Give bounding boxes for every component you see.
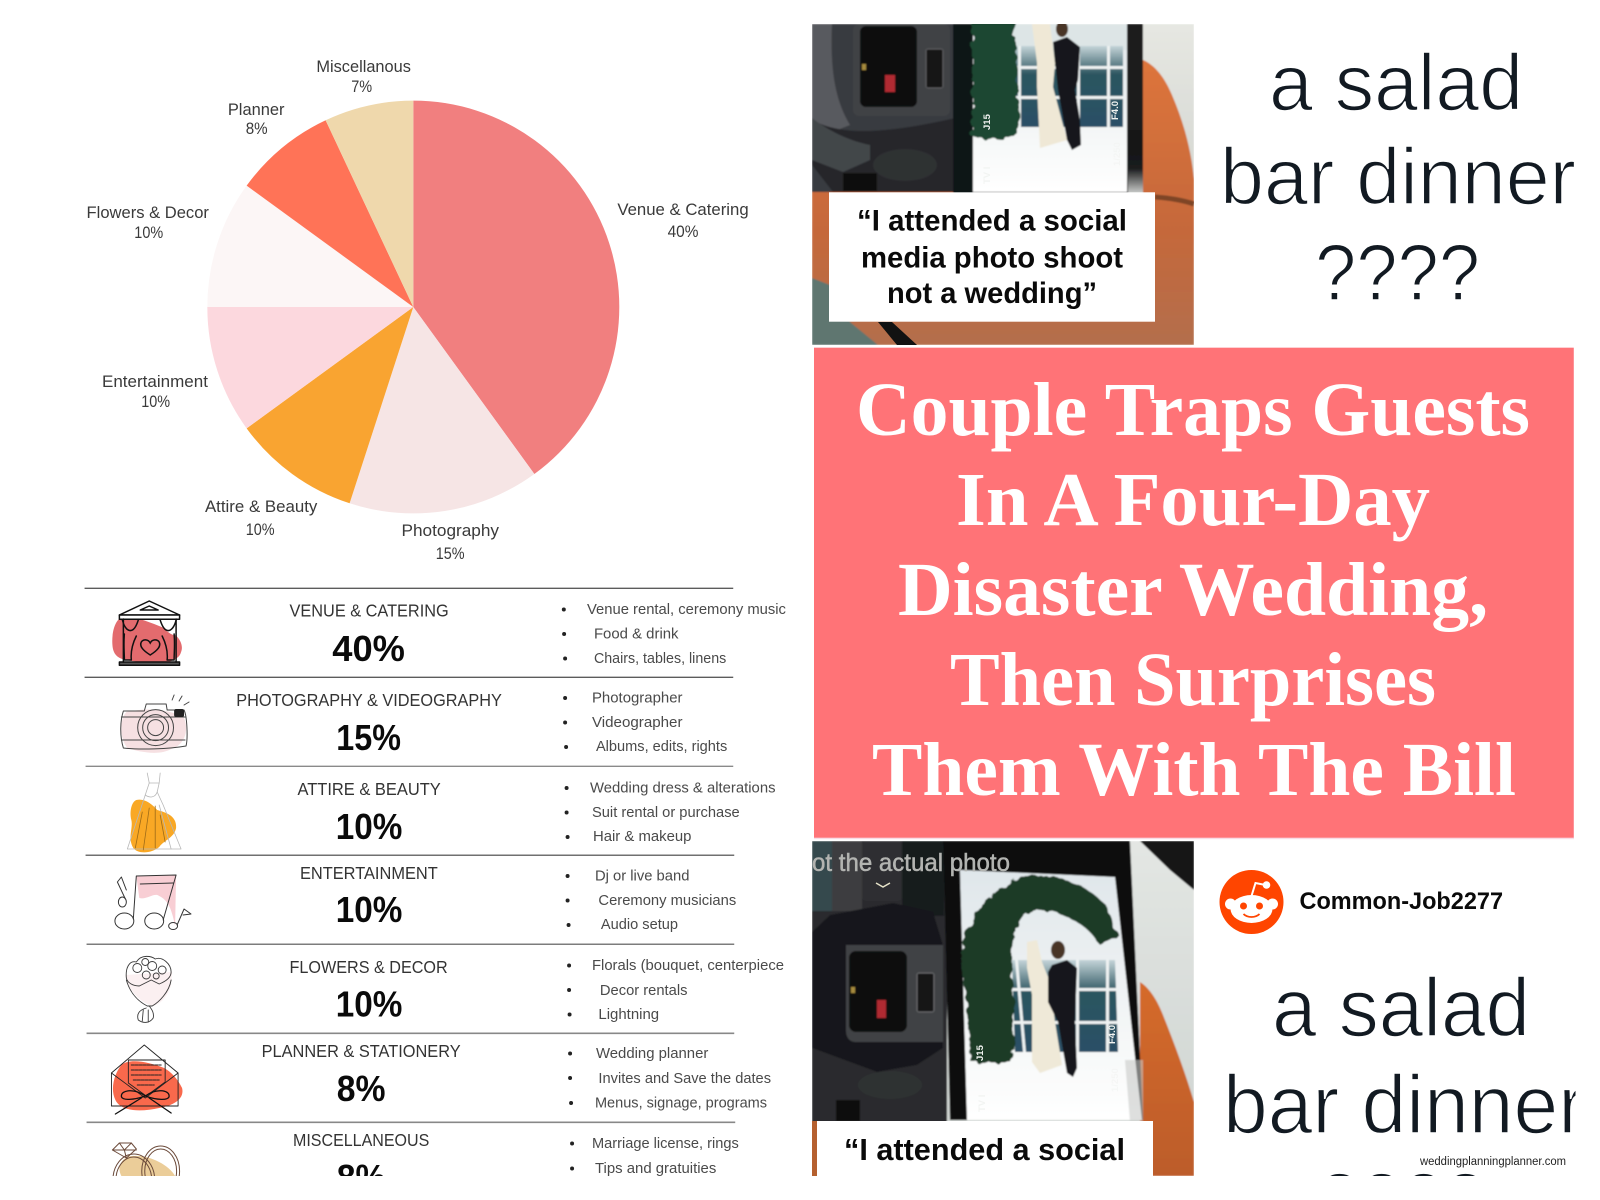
pie labels: Attire & Beauty	[205, 498, 318, 516]
heading: entertainment: ENTERTAINMENT	[300, 863, 438, 883]
text: a salad bar dinner top: ????	[1315, 228, 1480, 317]
watermark: weddingplanningplanner.com	[1419, 1156, 1566, 1168]
list: miscellaneous items: Marriage license, rings	[592, 1135, 739, 1152]
list: venue items	[562, 601, 786, 667]
screen readouts: TV I	[977, 1095, 988, 1112]
heading: photography and videography: PHOTOGRAPHY & VIDEOGRAPHY	[236, 690, 502, 710]
text: a salad bar dinner bottom	[1223, 961, 1585, 1200]
icon: camera	[121, 695, 189, 753]
list: planner items	[568, 1045, 771, 1112]
screen readouts: 1/250	[1112, 142, 1123, 166]
pie labels: 40%	[668, 223, 699, 241]
photo: couple under floral arch	[812, 841, 1194, 1176]
text: a salad bar dinner top	[1220, 38, 1576, 317]
pie labels: Miscellanous	[316, 58, 411, 76]
list: flowers items: Decor rentals	[600, 982, 687, 999]
percent: 10%: 10%	[336, 984, 402, 1025]
quote box: not a wedding”	[887, 277, 1097, 310]
heading: venue and catering: VENUE & CATERING	[290, 600, 449, 620]
icon: rings	[112, 1142, 180, 1176]
list: planner items: Wedding planner	[596, 1045, 708, 1062]
quote box: media photo shoot	[861, 242, 1123, 274]
pie labels: Photography	[402, 522, 500, 540]
screen readouts: TV I	[982, 167, 993, 184]
banner: article title	[814, 348, 1574, 839]
heading: attire and beauty: ATTIRE & BEAUTY	[297, 779, 441, 799]
list: miscellaneous items	[570, 1135, 739, 1177]
list: miscellaneous items: Tips and gratuities	[595, 1160, 716, 1177]
heading: flowers and decor: FLOWERS & DECOR	[290, 957, 448, 977]
pie labels: Planner	[228, 101, 285, 119]
pie labels: 10%	[246, 521, 275, 539]
screen readouts: 1/250	[1110, 1068, 1121, 1092]
list: attire items: Hair & makeup	[593, 828, 691, 845]
panel: top camera photo with quote	[812, 20, 1194, 345]
quote box	[829, 192, 1155, 322]
icon: dress	[127, 773, 181, 852]
list: entertainment items: Audio setup	[601, 916, 678, 933]
list: photography items: Photographer	[592, 690, 683, 707]
screen readouts: J15	[975, 1044, 986, 1061]
list: entertainment items: Dj or live band	[595, 867, 689, 885]
list: attire items: Wedding dress & alterations	[590, 779, 776, 797]
list: planner items: Invites and Save the dates	[598, 1070, 771, 1087]
percent: 8% (cropped): 8%	[337, 1158, 386, 1198]
screen readouts	[982, 101, 1123, 184]
icon: reddit logo	[1220, 870, 1284, 934]
list: entertainment items	[566, 867, 736, 933]
row: photography and videography	[121, 690, 727, 758]
banner: article title: Couple Traps Guests	[856, 368, 1530, 452]
heading: planner and stationery: PLANNER & STATIONERY	[262, 1041, 461, 1061]
list: photography items: Videographer	[592, 714, 683, 731]
icon: bouquet	[125, 956, 172, 1022]
username: Common-Job2277	[1300, 888, 1503, 915]
screen readouts	[975, 1025, 1121, 1112]
pie labels: 15%	[436, 545, 465, 563]
percent: 15%: 15%	[336, 718, 401, 758]
list: planner items: Menus, signage, programs	[595, 1094, 767, 1112]
banner: article title: Then Surprises	[950, 638, 1436, 722]
pie chart	[207, 101, 619, 513]
row: attire and beauty	[127, 773, 776, 852]
percent: 40%: 40%	[332, 629, 405, 669]
pie labels: 7%	[351, 78, 372, 96]
list: entertainment items: Ceremony musicians	[598, 892, 736, 909]
pie labels: Flowers & Decor	[87, 204, 209, 222]
pie labels: 10%	[134, 224, 163, 242]
pie labels: 8%	[246, 120, 268, 138]
icon: music notes	[115, 875, 191, 930]
text: a salad bar dinner bottom: bar dinner	[1223, 1058, 1585, 1151]
row: entertainment	[115, 863, 736, 933]
list: venue items: Venue rental, ceremony music	[587, 601, 786, 618]
overlay caption: of the actual photo: ot the actual photo	[812, 849, 1010, 877]
row: planner and stationery	[111, 1041, 771, 1114]
icon: venue	[112, 601, 182, 666]
text: a salad bar dinner bottom: a salad	[1272, 961, 1530, 1054]
panel: budget pie chart	[87, 58, 749, 563]
pie labels: 10%	[141, 393, 170, 411]
panel: bottom camera photo with quote	[812, 841, 1194, 1176]
photo: couple on camera screen	[812, 20, 1194, 345]
icon: envelope	[111, 1045, 182, 1114]
screen readouts: J15	[982, 113, 993, 130]
strap	[878, 322, 917, 345]
quote box cropped: “I attended a social	[844, 1132, 1125, 1167]
quote box cropped	[812, 1121, 1153, 1176]
list: flowers items	[567, 957, 784, 1023]
list: photography items: Albums, edits, rights	[596, 738, 727, 755]
banner: article title: In A Four-Day	[956, 458, 1430, 542]
row: miscellaneous	[112, 1134, 738, 1176]
percent: 8%: 8%	[337, 1069, 386, 1109]
panel: budget breakdown table	[85, 588, 786, 1200]
row: flowers and decor	[125, 956, 784, 1025]
screen readouts: F4.0	[1107, 1025, 1118, 1044]
quote box: “I attended a social	[857, 204, 1127, 238]
pie labels: Venue & Catering	[617, 201, 749, 219]
pie labels	[87, 58, 749, 563]
list: flowers items: Florals (bouquet, centerpiece	[592, 957, 784, 974]
list: venue items: Chairs, tables, linens	[594, 650, 726, 667]
pie labels: Entertainment	[102, 373, 208, 391]
chevron	[876, 883, 890, 887]
screen readouts: F4.0	[1110, 101, 1121, 120]
banner: article title: Disaster Wedding,	[898, 548, 1488, 632]
banner: article title: Them With The Bill	[872, 728, 1516, 812]
text: a salad bar dinner top: bar dinner	[1220, 132, 1576, 221]
percent: 10%: 10%	[336, 807, 402, 847]
list: photography items	[563, 690, 727, 755]
row: venue and catering	[112, 600, 786, 669]
list: attire items	[565, 779, 776, 845]
text: a salad bar dinner top: a salad	[1269, 38, 1523, 127]
list: venue items: Food & drink	[594, 625, 679, 643]
list: flowers items: Lightning	[598, 1006, 659, 1023]
percent: 10%: 10%	[336, 890, 402, 930]
heading: miscellaneous: MISCELLANEOUS	[293, 1130, 429, 1150]
list: attire items: Suit rental or purchase	[592, 804, 740, 821]
